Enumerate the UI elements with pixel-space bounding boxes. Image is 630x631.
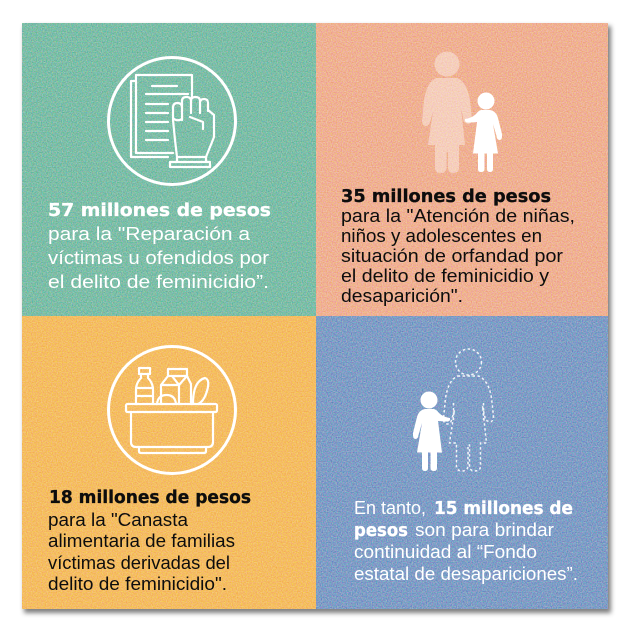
- text: 15 millones: pesos: [354, 521, 408, 541]
- icon: child silhouette: [465, 92, 502, 172]
- text: 57 millones: para la "Reparación a: [48, 223, 251, 244]
- text: 35 millones: para la "Atención de niñas,: [341, 206, 575, 226]
- text: 15 millones: En tanto,: [354, 497, 426, 518]
- text: 35 millones: situación de orfandad por: [341, 246, 563, 266]
- text: 57 millones: [48, 201, 271, 292]
- text: 15 millones: continuidad al “Fondo: [354, 541, 537, 562]
- icon: dashed woman outline: [444, 349, 494, 471]
- icon: child silhouette: [413, 392, 450, 471]
- text: 18 millones: delito de feminicidio".: [48, 573, 227, 594]
- text: 35 millones: [341, 187, 575, 306]
- text: 35 millones: desaparición".: [341, 286, 463, 306]
- text: 15 millones: son para brindar: [415, 519, 554, 540]
- panel: 57 millones, reparación: [22, 23, 316, 316]
- text: 18 millones: víctimas derivadas del: [48, 552, 230, 573]
- text: 15 millones: 15 millones de: [434, 499, 573, 519]
- text: 57 millones: el delito de feminicidio”.: [48, 271, 269, 292]
- icon: food basket: [108, 346, 236, 474]
- text: 35 millones: 35 millones de pesos: [341, 187, 551, 207]
- text: 57 millones: víctimas u ofendidos por: [48, 247, 269, 268]
- icon: document and raised fist: [108, 58, 236, 184]
- panel: 15 millones, desapariciones: [316, 316, 608, 609]
- icon: woman silhouette: [422, 52, 472, 173]
- panel: 35 millones, atención: [316, 23, 608, 316]
- text: 15 millones: estatal de desapariciones”.: [354, 563, 578, 584]
- text: 18 millones: [48, 488, 251, 594]
- text: 35 millones: niños y adolescentes en: [341, 226, 542, 246]
- text: 15 millones: [354, 497, 578, 584]
- text: 18 millones: para la "Canasta: [48, 509, 189, 530]
- text: 18 millones: 18 millones de pesos: [49, 488, 251, 508]
- text: 18 millones: alimentaria de familias: [48, 530, 235, 551]
- text: 35 millones: el delito de feminicidio y: [341, 266, 549, 286]
- text: 57 millones: 57 millones de pesos: [48, 201, 271, 221]
- panel: 18 millones, canasta: [22, 316, 316, 609]
